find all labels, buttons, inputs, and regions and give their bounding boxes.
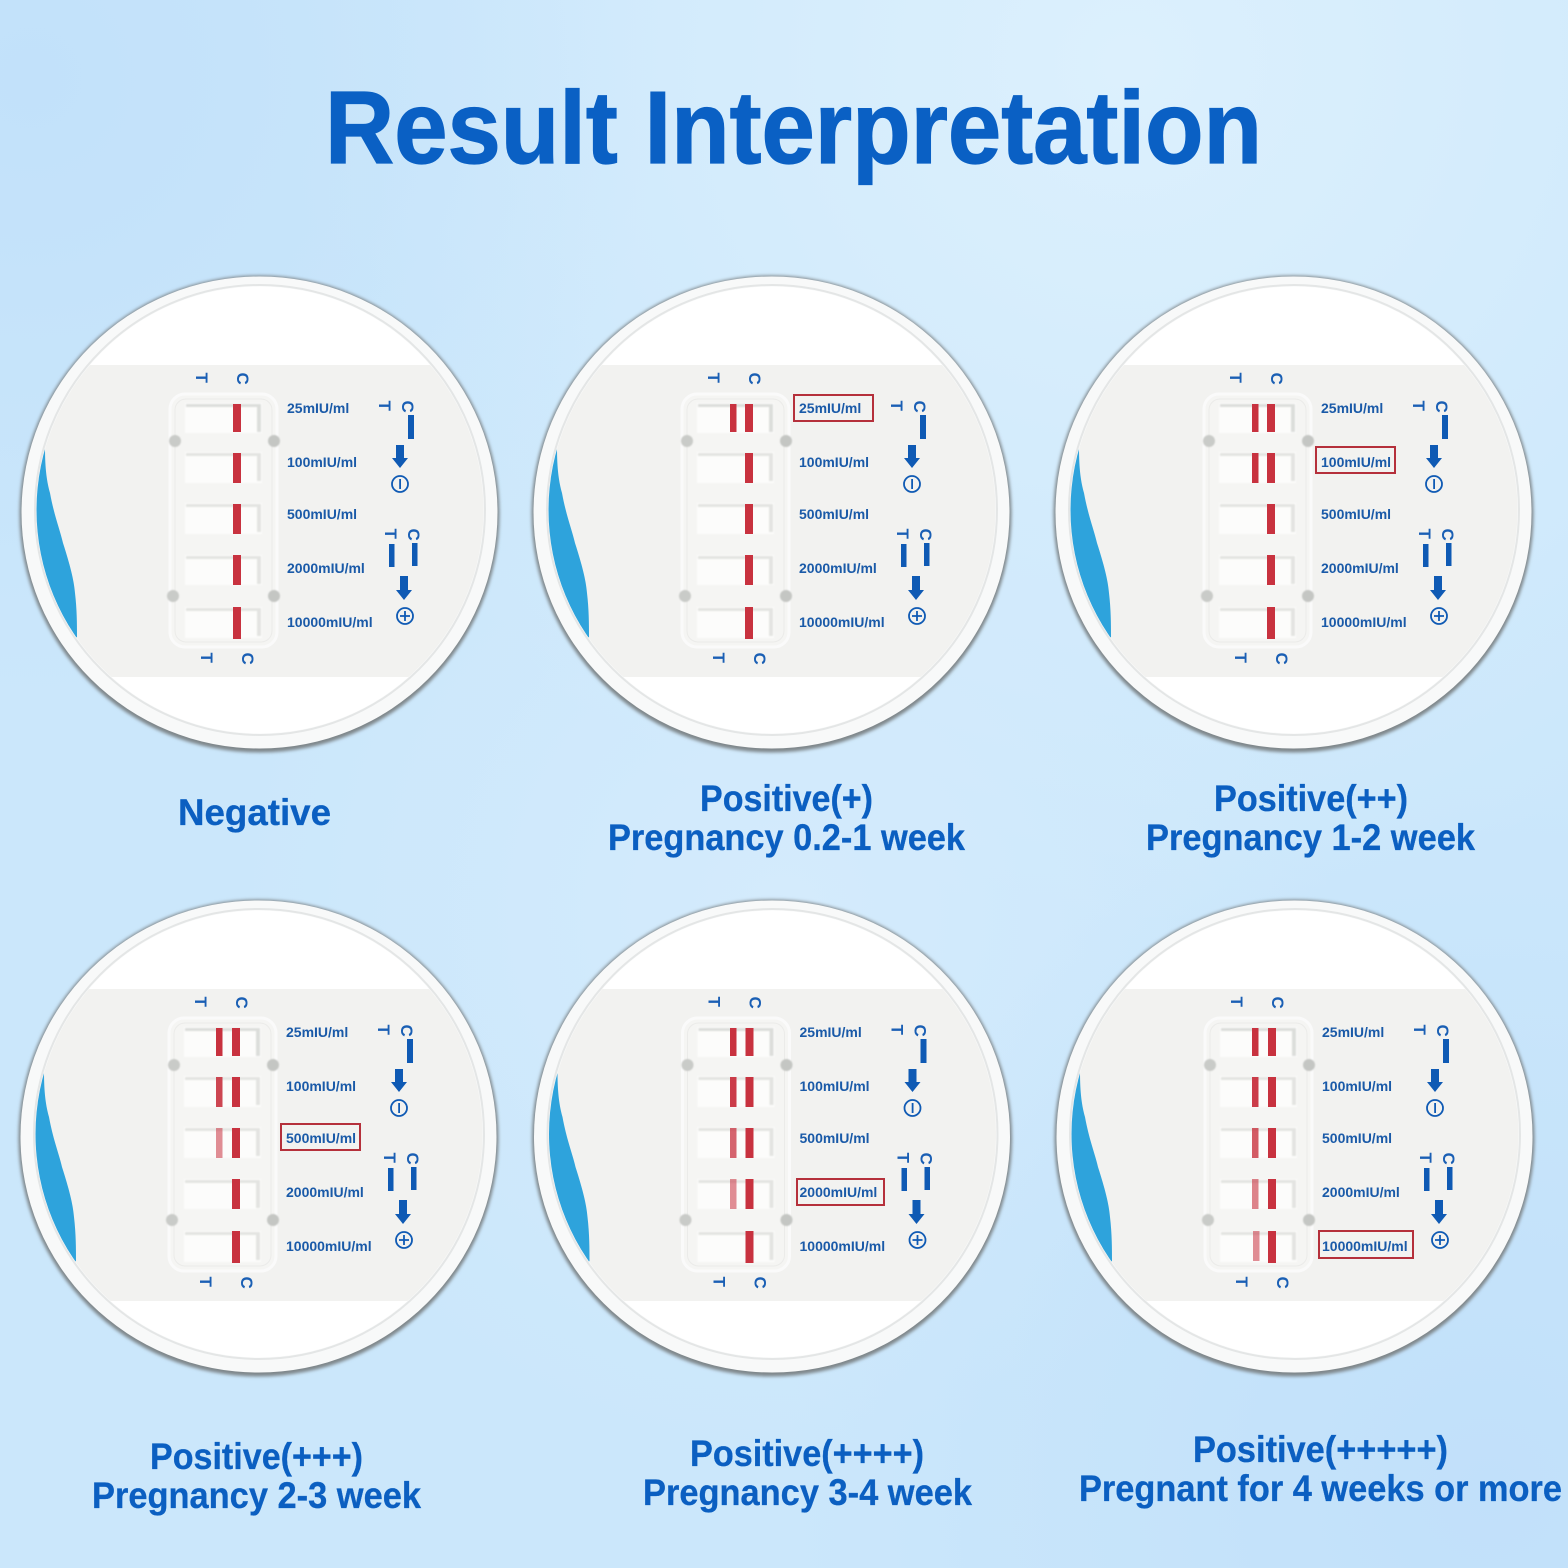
test strip labels: C [746, 996, 764, 1009]
concentration labels: 2000mIU/ml [1322, 1184, 1400, 1200]
test strip labels: T [710, 1276, 728, 1288]
red highlight box [794, 395, 873, 421]
test strip labels: C [1433, 1024, 1452, 1037]
concentration labels [1322, 1024, 1408, 1254]
test strip labels: T [380, 1152, 399, 1164]
test strip labels [191, 996, 422, 1289]
concentration labels [799, 400, 885, 630]
concentration labels: 100mIU/ml [1321, 454, 1391, 470]
panel: positive +++ circle [18, 900, 498, 1376]
panel: negative result circle [20, 276, 500, 752]
test line T [730, 404, 736, 432]
test strip labels: T [191, 996, 210, 1008]
caption: positive +: Positive(+) [700, 778, 873, 819]
caption: positive ++ [1146, 778, 1475, 858]
concentration labels: 2000mIU/ml [799, 560, 877, 576]
test strip labels: T [888, 1024, 906, 1036]
test lines T [1252, 404, 1258, 483]
concentration labels: 10000mIU/ml [286, 1238, 372, 1254]
test strip labels: C [403, 1152, 422, 1165]
concentration labels: 10000mIU/ml [1322, 1238, 1408, 1254]
test strip labels: C [397, 1024, 416, 1037]
red highlight box [281, 1124, 360, 1150]
concentration labels: 100mIU/ml [799, 454, 869, 470]
test strip labels [1226, 372, 1457, 665]
test strip labels: T [1416, 1152, 1435, 1164]
test strip labels: C [750, 652, 769, 665]
test strip labels: C [745, 372, 764, 385]
test strip labels: T [1231, 652, 1250, 664]
test strip labels [192, 372, 423, 665]
red highlight box [797, 1179, 884, 1205]
concentration labels: 500mIU/ml [1322, 1130, 1392, 1146]
concentration labels: 500mIU/ml [799, 506, 869, 522]
test strip labels: T [893, 528, 912, 540]
concentration labels: 2000mIU/ml [287, 560, 365, 576]
panel: positive +++++ circle [1054, 900, 1534, 1376]
test strip labels: C [238, 652, 257, 665]
test strip labels: C [233, 372, 252, 385]
concentration labels: 500mIU/ml [287, 506, 357, 522]
test strip labels: T [374, 1024, 393, 1036]
test lines T [1252, 1028, 1260, 1261]
concentration labels [286, 1024, 372, 1254]
test strip labels: T [1409, 400, 1428, 412]
concentration labels [1321, 400, 1407, 630]
test strip labels: C [398, 400, 417, 413]
concentration labels [800, 1024, 885, 1254]
caption: positive ++++: Pregnancy 3-4 week [643, 1472, 972, 1513]
test strip labels: C [910, 1024, 930, 1037]
panel: positive ++ circle [1054, 276, 1534, 752]
test strip labels: C [1267, 372, 1286, 385]
test strip labels: C [1272, 652, 1291, 665]
test strip labels: C [1268, 996, 1287, 1009]
test strip labels: T [1410, 1024, 1429, 1036]
test strip labels: C [1273, 1276, 1292, 1289]
test strip labels: T [375, 400, 394, 412]
test strip labels: T [1415, 528, 1434, 540]
caption: negative: Negative [178, 792, 331, 833]
test strip labels: T [1232, 1276, 1251, 1288]
concentration labels: 10000mIU/ml [1321, 614, 1407, 630]
test strip labels: C [237, 1276, 256, 1289]
concentration labels [287, 400, 373, 630]
concentration labels: 500mIU/ml [286, 1130, 356, 1146]
concentration labels: 10000mIU/ml [287, 614, 373, 630]
test strip labels [704, 372, 935, 665]
panel: positive ++++ circle [532, 900, 1012, 1376]
test strip labels: C [910, 400, 929, 413]
test strip labels: C [750, 1276, 770, 1289]
caption: positive + [608, 778, 965, 858]
concentration labels: 100mIU/ml [287, 454, 357, 470]
caption: positive +++ [92, 1436, 421, 1516]
caption: positive +++: Pregnancy 2-3 week [92, 1475, 421, 1516]
red highlight box [1319, 1231, 1413, 1258]
test strip labels: T [196, 1276, 215, 1288]
red highlight box [1316, 447, 1395, 473]
concentration labels: 100mIU/ml [286, 1078, 356, 1094]
test strip labels: C [1438, 528, 1457, 541]
panel: positive + circle [532, 276, 1012, 752]
caption: positive +++: Positive(+++) [150, 1436, 363, 1477]
concentration labels: 25mIU/ml [799, 400, 861, 416]
test strip labels: C [1439, 1152, 1458, 1165]
test strip labels: C [916, 1152, 936, 1165]
concentration labels: 25mIU/ml [1322, 1024, 1384, 1040]
caption: positive +++++: Positive(+++++) [1193, 1429, 1448, 1470]
test strip labels: T [887, 400, 906, 412]
concentration labels: 10000mIU/ml [799, 614, 885, 630]
concentration labels: 100mIU/ml [1322, 1078, 1392, 1094]
test strip labels: T [704, 996, 724, 1008]
caption: positive +: Pregnancy 0.2-1 week [608, 817, 965, 858]
test strip labels: T [192, 372, 211, 384]
concentration labels: 10000mIU/ml [800, 1238, 885, 1254]
test strip labels: T [1226, 372, 1245, 384]
concentration labels: 2000mIU/ml [800, 1184, 877, 1200]
concentration labels: 500mIU/ml [800, 1130, 870, 1146]
test strip labels: T [197, 652, 216, 664]
test strip labels: C [404, 528, 423, 541]
caption: positive +++++ [1079, 1429, 1562, 1509]
test strip labels: T [894, 1152, 912, 1164]
concentration labels: 100mIU/ml [800, 1078, 870, 1094]
test lines T [730, 1028, 736, 1209]
concentration labels: 25mIU/ml [286, 1024, 348, 1040]
test strip labels: T [381, 528, 400, 540]
caption: positive ++++: Positive(++++) [690, 1433, 924, 1474]
test lines T [216, 1028, 222, 1158]
test strip labels: C [916, 528, 935, 541]
concentration labels: 2000mIU/ml [286, 1184, 364, 1200]
test strip labels [704, 996, 936, 1289]
test strip labels: T [709, 652, 728, 664]
test strip labels [1227, 996, 1458, 1289]
caption: positive ++: Positive(++) [1214, 778, 1408, 819]
caption: positive ++++ [643, 1433, 972, 1513]
test strip labels: C [232, 996, 251, 1009]
test strip labels: T [1227, 996, 1246, 1008]
test strip labels: T [704, 372, 723, 384]
concentration labels: 2000mIU/ml [1321, 560, 1399, 576]
concentration labels: 25mIU/ml [800, 1024, 862, 1040]
title: Result Interpretation [325, 70, 1262, 185]
concentration labels: 25mIU/ml [287, 400, 349, 416]
concentration labels: 25mIU/ml [1321, 400, 1383, 416]
test strip labels: C [1432, 400, 1451, 413]
concentration labels: 500mIU/ml [1321, 506, 1391, 522]
caption: positive ++: Pregnancy 1-2 week [1146, 817, 1475, 858]
